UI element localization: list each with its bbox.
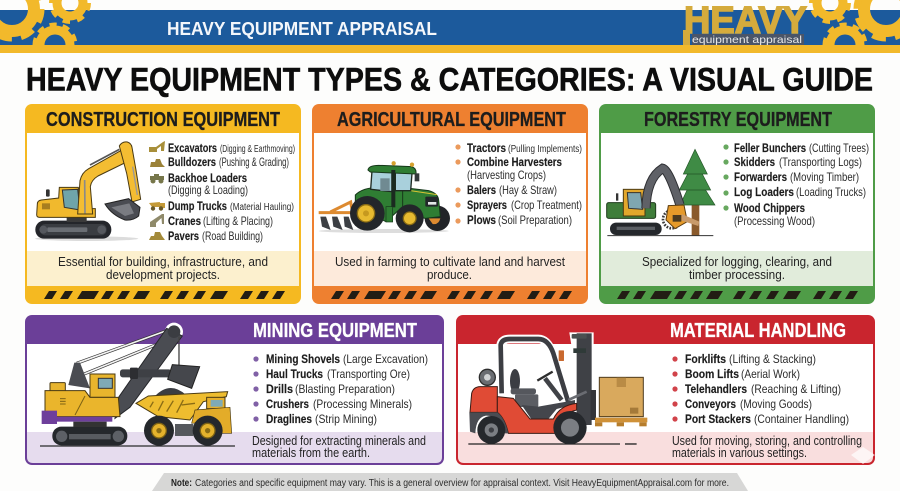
item: bulldozers: Bulldozers	[168, 155, 216, 169]
description: Used in farming to cultivate land and harvest	[335, 254, 565, 269]
item: boom lifts: Boom Lifts	[685, 367, 739, 381]
item: forwarders	[723, 170, 859, 184]
item: balers: (Hay & Straw)	[499, 184, 557, 197]
description: Specialized for logging, clearing, and	[642, 254, 832, 269]
header banner	[0, 0, 900, 53]
item: forwarders: (Moving Timber)	[790, 171, 859, 184]
item: tractors	[455, 141, 582, 155]
equipment list	[455, 141, 582, 227]
icon: dump truck small	[149, 202, 165, 211]
item: log loaders: (Loading Trucks)	[796, 186, 866, 199]
item: telehandlers: (Reaching & Lifting)	[751, 383, 841, 396]
item: feller bunchers	[723, 141, 869, 155]
icon: left gears	[0, 0, 88, 45]
description	[58, 254, 268, 282]
item: conveyors	[672, 397, 812, 411]
item: cranes	[168, 214, 273, 228]
item: mining shovels: (Large Excavation)	[343, 353, 428, 366]
illustration: tractor	[319, 161, 450, 233]
illustration: forklift with pallet	[468, 333, 647, 444]
item: skidders	[723, 155, 862, 169]
item: sprayers	[455, 198, 582, 212]
item: balers: Balers	[467, 183, 496, 197]
item: drills	[253, 382, 395, 396]
item: draglines: (Strip Mining)	[315, 413, 377, 426]
item: mining shovels	[253, 352, 428, 366]
item: plows: (Soil Preparation)	[498, 214, 572, 227]
illustration: excavator	[35, 142, 141, 241]
item: mining shovels: Mining Shovels	[266, 352, 340, 366]
item: bulldozers	[168, 155, 289, 169]
item: pavers	[168, 229, 263, 243]
item: forklifts: (Lifting & Stacking)	[729, 353, 816, 366]
item: forklifts: Forklifts	[685, 352, 726, 366]
item: haul trucks: Haul Trucks	[266, 367, 323, 381]
description: Used for moving, storing, and controlling	[672, 433, 862, 448]
item: crushers	[253, 397, 412, 411]
item: haul trucks	[253, 367, 410, 381]
item: drills: (Blasting Preparation)	[295, 383, 395, 396]
item: feller bunchers: Feller Bunchers	[734, 141, 806, 155]
item: sprayers: Sprayers	[467, 198, 507, 212]
panel: forestry equipment	[599, 104, 875, 304]
item: forklifts	[672, 352, 816, 366]
item: drills: Drills	[266, 382, 293, 396]
description: Designed for extracting minerals and	[252, 433, 426, 448]
description: Essential for building, infrastructure, and	[58, 254, 268, 269]
item: draglines	[253, 412, 377, 426]
equipment list with icons	[149, 141, 295, 243]
item: boom lifts: (Aerial Work)	[741, 368, 800, 381]
item: cranes: (Lifting & Placing)	[203, 215, 273, 228]
footer note	[152, 473, 748, 491]
heading: MATERIAL HANDLING	[670, 320, 846, 342]
item: haul trucks: (Transporting Ore)	[327, 368, 410, 381]
item: feller bunchers: (Cutting Trees)	[809, 142, 869, 155]
item: port stackers: Port Stackers	[685, 412, 751, 426]
item: conveyors: (Moving Goods)	[740, 398, 812, 411]
item: combine harvesters: (Harvesting Crops)	[467, 169, 546, 182]
banner title: HEAVY EQUIPMENT APPRAISAL	[167, 19, 437, 39]
heading: FORESTRY EQUIPMENT	[644, 109, 832, 131]
description	[252, 433, 426, 460]
item: skidders: Skidders	[734, 155, 775, 169]
item: sprayers: (Crop Treatment)	[511, 199, 582, 212]
panel: mining equipment	[25, 315, 444, 465]
icon: paver small	[149, 232, 165, 240]
icon: backhoe small	[150, 174, 164, 184]
item: balers	[455, 183, 557, 197]
description	[672, 433, 862, 460]
equipment list	[672, 352, 849, 426]
item: forwarders: Forwarders	[734, 170, 787, 184]
description: development projects.	[106, 267, 220, 282]
logo: HEAVY	[684, 0, 807, 42]
item: backhoe loaders: Backhoe Loaders	[168, 171, 247, 185]
item: skidders: (Transporting Logs)	[779, 156, 862, 169]
equipment list	[723, 141, 869, 228]
item: wood chippers: Wood Chippers	[734, 201, 805, 215]
item: telehandlers: Telehandlers	[685, 382, 747, 396]
item: wood chippers: (Processing Wood)	[734, 215, 815, 228]
item: bulldozers: (Pushing & Grading)	[219, 156, 289, 169]
heading: CONSTRUCTION EQUIPMENT	[46, 109, 280, 131]
description: materials from the earth.	[252, 445, 370, 460]
item: draglines: Draglines	[266, 412, 312, 426]
item: backhoe loaders	[168, 171, 248, 197]
heading: MINING EQUIPMENT	[253, 320, 417, 342]
item: pavers: (Road Building)	[202, 230, 263, 243]
description: produce.	[427, 267, 472, 282]
footer note: Categories and specific equipment may vary. This is a general overview for appraisal context. Visit HeavyEquipmentAppraisal.com for more.	[195, 478, 729, 489]
item: crushers: (Processing Minerals)	[313, 398, 412, 411]
item: combine harvesters	[455, 155, 562, 182]
heading: AGRICULTURAL EQUIPMENT	[337, 109, 566, 131]
logo: equipment appraisal	[692, 34, 802, 46]
item: dump trucks	[168, 199, 294, 213]
item: cranes: Cranes	[168, 214, 201, 228]
item: wood chippers	[723, 201, 815, 228]
hazard stripes	[331, 291, 572, 299]
item: plows	[455, 213, 572, 227]
item: port stackers: (Container Handling)	[754, 413, 849, 426]
icon: bulldozer small	[150, 159, 165, 167]
description: materials in various settings.	[672, 445, 807, 460]
item: port stackers	[672, 412, 849, 426]
panel: construction equipment	[25, 104, 301, 304]
item: excavators: (Digging & Earthmoving)	[220, 144, 295, 155]
item: pavers: Pavers	[168, 229, 199, 243]
item: log loaders: Log Loaders	[734, 185, 794, 199]
item: conveyors: Conveyors	[685, 397, 736, 411]
item: excavators: Excavators	[168, 141, 217, 155]
item: plows: Plows	[467, 213, 496, 227]
illustration: mining shovel and haul truck	[40, 323, 235, 446]
item: tractors: Tractors	[467, 141, 506, 155]
item: dump trucks: (Material Hauling)	[230, 202, 294, 213]
footer note: Note:	[171, 478, 192, 489]
item: crushers: Crushers	[266, 397, 309, 411]
item: dump trucks: Dump Trucks	[168, 199, 227, 213]
description: timber processing.	[689, 267, 785, 282]
item: telehandlers	[672, 382, 841, 396]
description	[642, 254, 832, 282]
description	[335, 254, 565, 282]
panel: material handling	[456, 315, 875, 465]
hazard stripes	[617, 291, 858, 299]
item: excavators	[168, 141, 295, 155]
item: log loaders	[723, 185, 866, 199]
item: combine harvesters: Combine Harvesters	[467, 155, 562, 169]
item: boom lifts	[672, 367, 800, 381]
item: tractors: (Pulling Implements)	[508, 144, 582, 155]
icon: crane small	[150, 214, 164, 227]
equipment list	[253, 352, 428, 426]
item: backhoe loaders: (Digging & Loading)	[168, 184, 248, 197]
icon: right gears	[812, 0, 900, 45]
icon: excavator small	[149, 141, 165, 152]
panel: agricultural equipment	[312, 104, 588, 304]
hazard stripes	[44, 291, 285, 299]
illustration: feller buncher and tree	[607, 149, 715, 236]
